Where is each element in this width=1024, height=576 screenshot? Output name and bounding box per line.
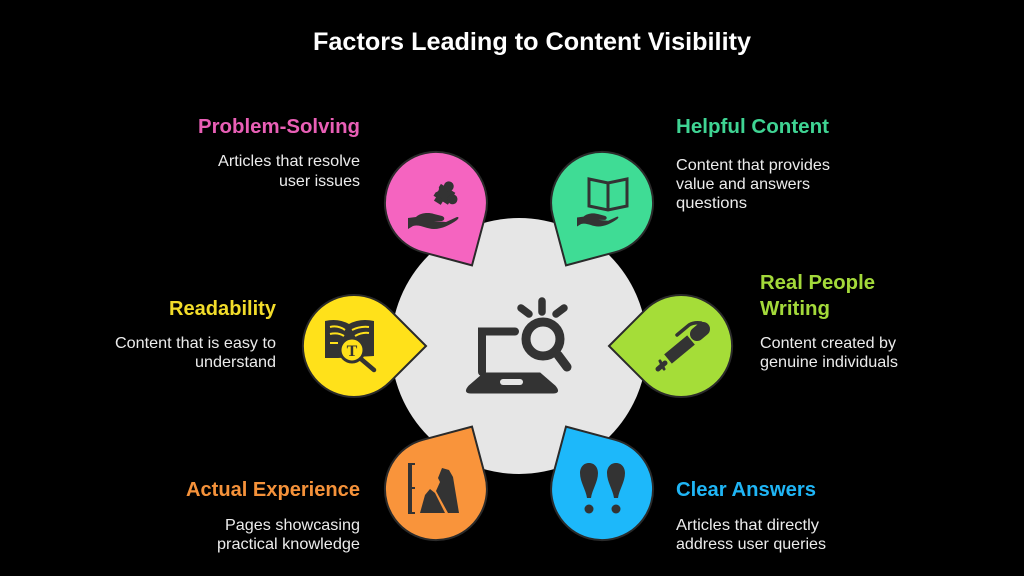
description: genuine individuals — [760, 354, 898, 371]
icon: open book in hand — [577, 179, 627, 226]
description — [217, 517, 360, 553]
panel: actual experience — [186, 401, 516, 559]
panel: clear answers — [522, 401, 826, 559]
description: address user queries — [676, 536, 826, 553]
description: Articles that directly — [676, 517, 819, 534]
description: Content that provides — [676, 157, 830, 174]
description — [676, 157, 830, 212]
central hub circle — [391, 218, 647, 474]
heading: Writing — [760, 298, 830, 320]
description — [760, 335, 898, 371]
heading — [760, 272, 875, 320]
description: understand — [195, 354, 276, 371]
description — [218, 153, 360, 190]
panel: problem-solving — [198, 116, 516, 291]
heading: Problem-Solving — [198, 116, 360, 138]
description — [676, 517, 826, 553]
icon: E with rocks — [408, 463, 459, 514]
panel: real people writing — [609, 272, 898, 397]
heading: Clear Answers — [676, 479, 816, 501]
panel: readability — [115, 295, 426, 397]
description: value and answers — [676, 176, 810, 193]
description: user issues — [279, 173, 360, 190]
petal: yellow — [303, 295, 426, 397]
title: Factors Leading to Content Visibility — [313, 28, 751, 56]
panel: helpful content — [522, 116, 830, 291]
description: questions — [676, 195, 747, 212]
icon: book with magnified T: T — [347, 343, 358, 360]
description: Articles that resolve — [218, 153, 360, 170]
icon: book with magnified T — [325, 320, 374, 370]
petal: lime — [609, 295, 732, 397]
petal: blue — [522, 401, 672, 559]
petal: green — [522, 133, 672, 291]
heading: Actual Experience — [186, 479, 360, 501]
heading: Readability — [169, 298, 277, 320]
icon: laptop with magnifier — [466, 301, 567, 393]
heading: Helpful Content — [676, 116, 829, 138]
description: Content created by — [760, 335, 896, 352]
description: Pages showcasing — [225, 517, 360, 534]
petal: orange — [366, 401, 516, 559]
icon: puzzle piece in hand — [408, 175, 464, 229]
heading: Real People — [760, 272, 875, 294]
description: practical knowledge — [217, 536, 360, 553]
icon: double exclamation marks — [580, 463, 625, 514]
description: Content that is easy to — [115, 335, 276, 352]
icon: pen — [658, 323, 703, 369]
description — [115, 335, 276, 371]
petal: pink — [366, 133, 516, 291]
